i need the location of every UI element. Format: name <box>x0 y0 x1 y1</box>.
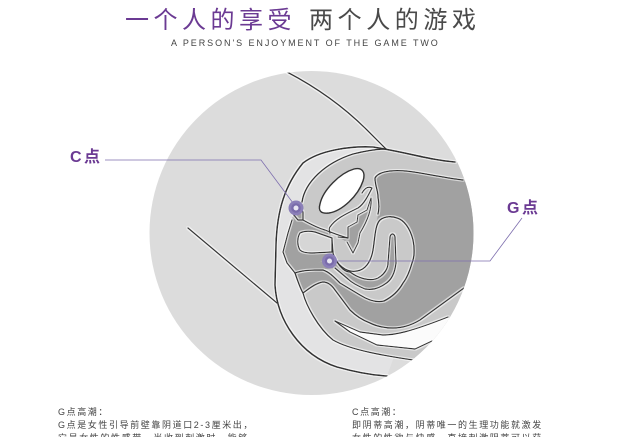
uterus and vaginal wall <box>300 217 414 302</box>
title: 一个人的享受 两个人的游戏 <box>125 7 481 34</box>
text: C point description: C点高潮： <box>352 407 402 417</box>
marker: G point <box>322 254 337 268</box>
label: G point: G点 <box>507 200 540 217</box>
text: G point description <box>58 407 254 437</box>
text: G point description: G点高潮： <box>58 407 109 417</box>
anatomical diagram <box>105 71 522 395</box>
subtitle: A PERSON'S ENJOYMENT OF THE GAME TWO <box>171 38 440 48</box>
text: C point description <box>352 407 543 437</box>
dark organ region <box>283 171 480 328</box>
uterus body <box>330 233 374 270</box>
leader line: G point <box>329 218 522 261</box>
cross-section <box>188 72 480 376</box>
text: C point description: 即阴蒂高潮，阴蒂唯一的生理功能就激发 <box>352 420 543 430</box>
label: C point: C点 <box>70 149 103 166</box>
light band <box>275 147 400 376</box>
medium tissue <box>302 150 474 359</box>
leader line: C point <box>105 160 296 207</box>
body contours <box>287 72 386 149</box>
labia island <box>298 231 332 253</box>
rectal canal <box>340 318 449 348</box>
uterine cavity <box>340 202 370 252</box>
bladder <box>319 169 364 213</box>
organ outlines <box>375 171 463 214</box>
text: G point description: G点是女性引导前壁靠阴道口2-3厘米出， <box>58 420 254 430</box>
vaginal canal <box>300 234 396 289</box>
marker: C point <box>288 200 304 216</box>
circle background <box>150 71 474 395</box>
